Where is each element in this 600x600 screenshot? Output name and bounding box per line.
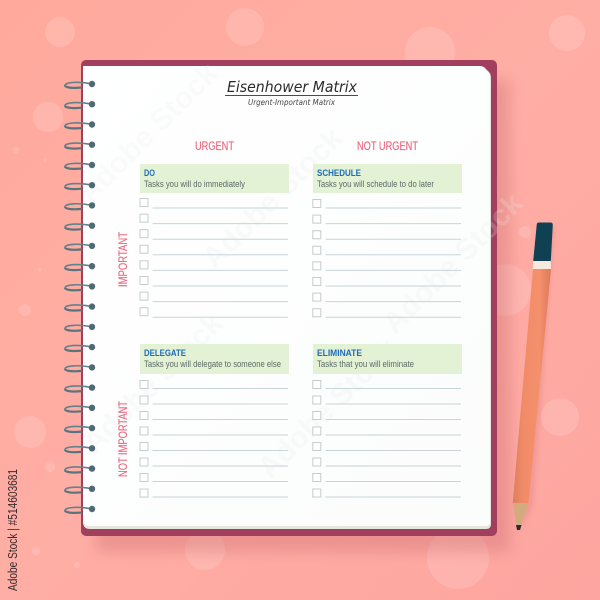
- delegate description: Tasks you will delegate to someone else: [144, 359, 281, 369]
- watermarks: Adobe Stock: [72, 57, 225, 210]
- row heading: important: IMPORTANT: [116, 231, 130, 287]
- schedule header box: [313, 164, 462, 193]
- column heading: urgent: URGENT: [195, 139, 235, 153]
- watermarks: Adobe Stock: [197, 122, 350, 275]
- do lines: [152, 208, 288, 317]
- subtitle: Urgent-Important Matrix: [248, 98, 336, 107]
- watermarks: Adobe Stock: [252, 332, 405, 485]
- delegate checkboxes: [140, 380, 148, 497]
- pencil body: [513, 269, 551, 503]
- title underline: [225, 95, 358, 96]
- row heading: not important: NOT IMPORTANT: [116, 400, 130, 477]
- delegate lines: [152, 388, 288, 497]
- pencil eraser cap: [533, 222, 553, 261]
- column heading: not urgent: NOT URGENT: [357, 139, 419, 153]
- watermarks: Adobe Stock: [377, 187, 530, 340]
- delegate heading: DELEGATE: [144, 348, 186, 359]
- notebook page: [83, 66, 490, 526]
- watermarks: [72, 57, 530, 485]
- notebook cover: [81, 60, 497, 536]
- quadrant: schedule: [313, 164, 462, 317]
- schedule heading: SCHEDULE: [317, 168, 361, 179]
- do heading: DO: [144, 168, 155, 179]
- notebook: [72, 57, 530, 536]
- schedule description: Tasks you will schedule to do later: [317, 179, 434, 189]
- pencil shadow: [522, 226, 555, 530]
- spiral binding: [65, 81, 95, 513]
- schedule checkboxes: [313, 200, 321, 317]
- eliminate heading: ELIMINATE: [317, 348, 362, 359]
- do header box: [140, 164, 289, 193]
- pencil wood tip: [513, 503, 528, 530]
- watermarks: Adobe Stock: [77, 307, 230, 460]
- title: Eisenhower Matrix: [227, 78, 357, 96]
- eliminate header box: [313, 344, 462, 374]
- quadrant: delegate: [140, 344, 289, 497]
- notebook shadow: [96, 80, 510, 552]
- delegate header box: [140, 344, 289, 374]
- pencil lead: [516, 525, 522, 530]
- stock id caption: Adobe Stock | #514603681: [6, 469, 20, 591]
- eliminate checkboxes: [313, 380, 321, 497]
- pencil: [513, 222, 555, 530]
- notebook page edge: [83, 66, 491, 529]
- pencil ferrule band: [533, 261, 551, 269]
- quadrant: eliminate: [313, 344, 462, 497]
- eliminate lines: [326, 388, 461, 497]
- eliminate description: Tasks that you will eliminate: [317, 359, 414, 369]
- quadrant: do: [140, 164, 289, 317]
- do description: Tasks you will do immediately: [144, 179, 245, 189]
- do checkboxes: [140, 198, 148, 316]
- schedule lines: [326, 208, 461, 317]
